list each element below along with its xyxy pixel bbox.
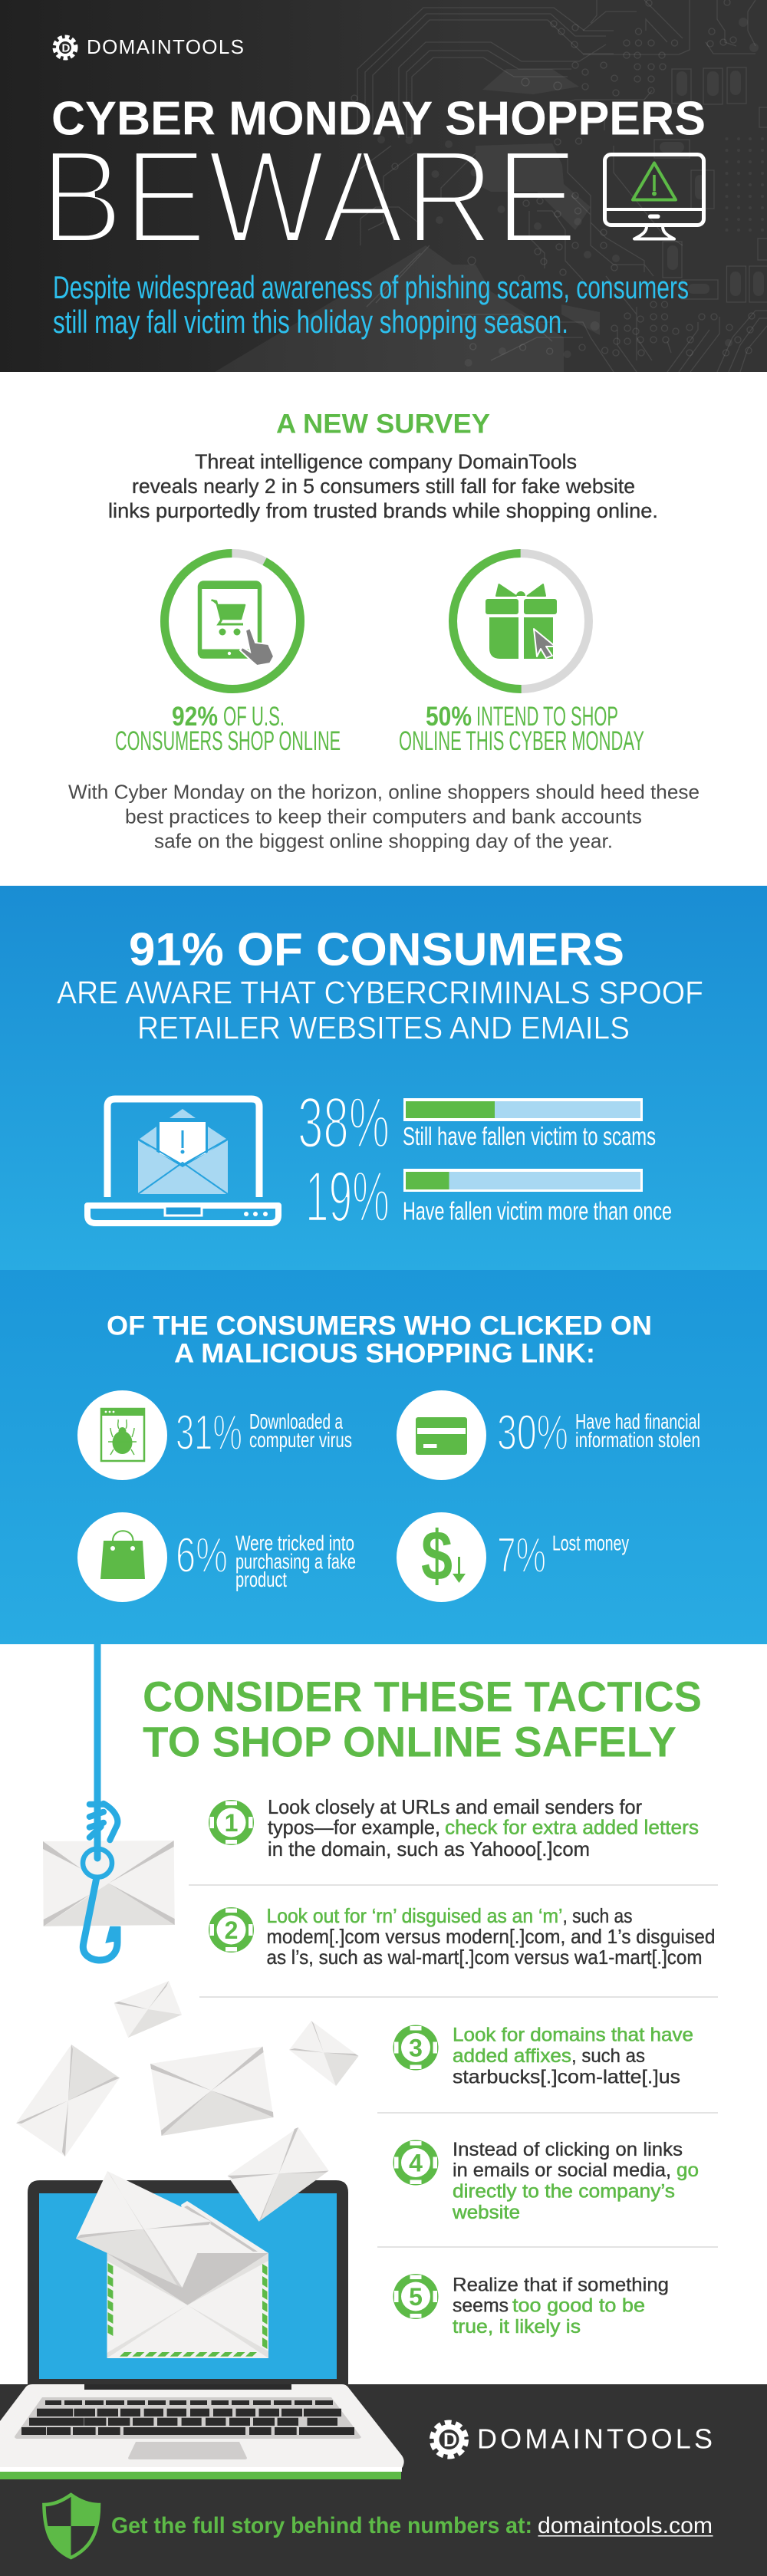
subheading: ARE AWARE THAT CYBERCRIMINALS SPOOF [57,975,703,1011]
heading: a new survey: A NEW SURVEY [276,410,490,439]
logo: DomainTools: DOMAINTOOLS [87,35,244,58]
heading: BEWARE: BEWARE [40,123,578,272]
subheading [57,975,703,1046]
stat: 7% lost money: Lost money [552,1531,629,1555]
stat caption: 92%: 92% [172,702,218,732]
tactic 3 [393,2025,693,2088]
heading: consumers who clicked: A MALICIOUS SHOPPING LINK: [174,1339,595,1369]
stat: 6% fake product [77,1512,356,1602]
stat: 31% computer virus: 31% [176,1404,242,1460]
stat: 38%: 38% [298,1082,390,1163]
icon: chip 1: 1 [225,1809,238,1837]
panel: tactics [0,1644,767,2385]
panel: consumers who clicked [0,1270,767,1644]
panel: hero header [0,0,767,372]
illustration: flying envelope centre [150,2046,273,2136]
stat: 7% lost money: 7% [497,1527,546,1583]
stat: 30% financial information: Have had financial [575,1410,700,1433]
icon: credit card [397,1390,486,1480]
stat: 19%: 19% [305,1156,390,1236]
icon: chip 2 [209,1907,254,1953]
heading: tactics [143,1673,702,1766]
subheading: RETAILER WEBSITES AND EMAILS [137,1010,630,1046]
icon: monitor with warning [604,155,704,239]
intro text: reveals nearly 2 in 5 consumers still fall for fake website [132,475,635,498]
tactic 1: check for extra added letters [445,1816,699,1839]
icon: chip 4: 4 [409,2149,423,2176]
stat: 30% financial information: information stolen [575,1428,700,1452]
best practices text [68,781,700,853]
stat caption: 92%: OF U.S. [223,702,285,732]
logo: DomainTools: D [61,41,71,55]
illustration: large envelope over screen [76,2171,212,2289]
chart: 50% ring with gift icon [453,554,589,689]
tactic 1: Look closely at URLs and email senders for [268,1795,642,1818]
icon: chip 4 [393,2140,439,2186]
illustration: hooked envelope [43,1644,175,1960]
best practices text: best practices to keep their computers and bank accounts [125,805,642,828]
logo: DomainTools footer: D [443,2430,457,2451]
icon: shopping bag [77,1512,167,1602]
panel: 91% of consumers [0,886,767,1270]
best practices text: safe on the biggest online shopping day of the year. [154,830,613,853]
stat caption: 92% [115,702,341,756]
tactic 4: go [676,2160,699,2181]
tactic 3: Look for domains that have [453,2025,693,2046]
icon: chip 1 [209,1800,254,1845]
stat: 7% lost money [397,1512,629,1602]
tactic 2: modem[.]com versus modern[.]com, and 1’s disguised [267,1925,715,1948]
heading: tactics: TO SHOP ONLINE SAFELY [143,1718,676,1766]
stat: 30% financial information: 30% [497,1404,568,1460]
heading: Cyber Monday Shoppers: CYBER MONDAY SHOPPERS [51,93,706,146]
tactic 4: website [452,2202,520,2223]
tactic 5: Realize that if something [453,2275,669,2296]
tactic 5: too good to be [512,2295,645,2316]
stat: 6% fake product: Were tricked into [235,1531,354,1555]
best practices text: With Cyber Monday on the horizon, online shoppers should heed these [68,781,700,804]
panel: footer [0,2384,767,2576]
stat caption: 50%: 50% [426,702,472,732]
illustration: flying envelope left [16,2045,120,2157]
tactic 2: Look out for ‘rn’ disguised as an ‘m’ [267,1904,563,1927]
icon: chip 3: 3 [409,2034,423,2061]
stat: 6% fake product: purchasing a fake [235,1550,356,1574]
icon: laptop with envelope [87,1099,278,1223]
icon: chip 3 [393,2025,439,2071]
chart: 92% ring with tablet icon [140,529,324,713]
icon: dollar sign with down arrow: $ [421,1517,453,1595]
intro text: Threat intelligence company DomainTools [195,450,577,473]
stat: 31% computer virus: computer virus [249,1428,352,1452]
illustration: flying envelope right [289,2021,359,2086]
tactic 1 [209,1795,699,1860]
tactic 2: as l’s, such as wal-mart[.]com versus wa1-mart[.]com [267,1946,703,1969]
illustration: flying envelope top [114,1981,182,2038]
heading: consumers who clicked [107,1311,652,1369]
icon: dollar sign with down arrow [397,1512,486,1602]
stat caption: 50% [399,702,644,756]
tactic 3: starbucks[.]com-latte[.]us [453,2067,680,2088]
stat: 38%: Still have fallen victim to scams [403,1122,656,1150]
stat caption: 50%: INTEND TO SHOP [476,702,618,732]
call to action: domaintools.com [538,2513,713,2538]
illustration: envelope over screen right [227,2127,329,2222]
stat: 6% fake product: 6% [176,1527,228,1583]
illustration: open envelope on screen [107,2201,268,2358]
tactic 5: true, it likely is [453,2316,581,2337]
icon: chip 5 [393,2274,439,2319]
icon: bug in browser [77,1390,167,1480]
stat: 30% financial information [397,1390,700,1480]
heading: 91% of consumers: 91% OF CONSUMERS [129,923,624,975]
tactic 4 [393,2139,699,2223]
icon: shield [42,2492,101,2560]
stat: 31% computer virus: Downloaded a [249,1410,343,1433]
icon: chip 5: 5 [409,2283,423,2311]
tactic 4: in emails or social media, [453,2160,671,2181]
subtitle: still may fall victim this holiday shopping season. [53,304,568,340]
panel: a new survey [0,372,767,886]
icon: chip 2: 2 [225,1916,238,1944]
stat caption: 92%: CONSUMERS SHOP ONLINE [115,726,341,756]
tactic 4: directly to the company’s [453,2181,675,2203]
stat: 31% computer virus [77,1390,352,1480]
stat: 6% fake product: product [235,1568,287,1591]
tactic 4: Instead of clicking on links [453,2139,683,2160]
stat: 19% [305,1156,672,1236]
heading: tactics: CONSIDER THESE TACTICS [143,1673,702,1721]
tactic 5: seems [453,2295,509,2316]
tactic 3: added affixes [453,2045,571,2067]
call to action: Get the full story behind the numbers at: [111,2513,532,2538]
circuit board background pattern [215,0,767,372]
tactic 2 [209,1904,715,1969]
tactic 5 [393,2274,669,2337]
tactic 3: , such as [571,2045,645,2067]
tactic 2: , such as [563,1904,632,1927]
illustration: laptop keyboard base [0,2384,404,2479]
intro text [108,450,658,522]
intro text: links purportedly from trusted brands while shopping online. [108,499,658,522]
tactic 1: in the domain, such as Yahooo[.]com [268,1837,590,1860]
subtitle [53,269,689,340]
tactic 1: typos—for example, [268,1816,440,1839]
stat: 38% [298,1082,656,1163]
logo: DomainTools footer: DOMAINTOOLS [477,2423,713,2455]
heading: consumers who clicked: OF THE CONSUMERS WHO CLICKED ON [107,1311,652,1341]
illustration: laptop screen [28,2180,348,2385]
